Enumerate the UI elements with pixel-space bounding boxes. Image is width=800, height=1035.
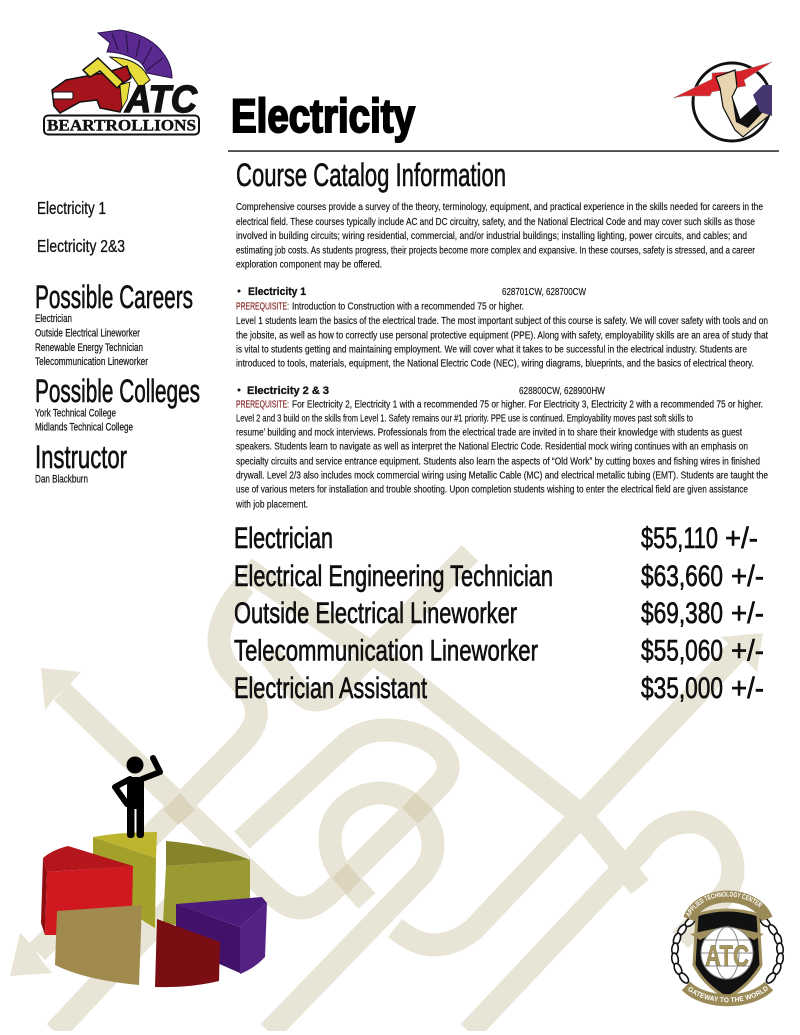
salary list: $69,380 [641,597,723,630]
dark red slice [155,919,220,987]
sidebar: possible careers [35,279,193,368]
sidebar: possible careers: Electrician [35,313,72,325]
shield [694,910,761,998]
sidebar: possible colleges: Possible Colleges [35,373,200,409]
text block: Electricity 1: PREREQUISITE: [236,300,289,312]
logo: ATC Beartrollions [44,30,199,134]
band: central loop [269,793,433,1032]
text block: Electricity 1: 628701CW, 628700CW [502,286,586,298]
title: Electricity [231,89,415,142]
laurel right [758,916,784,985]
sidebar: possible colleges: Midlands Technical College [35,422,133,434]
text block: course overview: exploration component may be offered. [236,258,382,270]
salary list: Outside Electrical Lineworker [234,597,517,630]
nameplate [44,116,199,134]
sidebar: possible careers: Renewable Energy Technician [35,342,143,354]
mane [120,82,130,108]
olive slice [163,841,250,925]
tan slice [55,905,142,985]
salary list: Electrician [234,522,333,555]
icon: person standing on chart [115,756,160,838]
salary list: $55,060 [641,634,723,668]
header rule [228,150,779,152]
laurel left [671,916,697,985]
sidebar: possible careers: Telecommunication Lineworker [35,356,148,368]
salary list: Telecommunication Lineworker [234,634,538,668]
helmet crest base [110,57,150,88]
salary list: $35,000 [641,672,723,705]
sidebar: possible careers: Outside Electrical Lineworker [35,328,140,340]
band: right arc [469,822,733,1032]
salary list: +/- [731,560,764,593]
globe [701,927,753,979]
ATC lettering: ATC [124,79,198,121]
text block: Electricity 1: Electricity 1 [248,286,306,298]
helmet brow [83,58,123,88]
salary list: +/- [731,672,764,705]
arrow: top-left band with loop [41,668,448,908]
heading: course catalog: Course Catalog Information [236,157,506,193]
sidebar: instructor: Instructor [35,439,127,475]
sidebar: instructor [35,439,127,486]
text block: Electricity 1: Introduction to Construction with a recommended 75 or higher. [292,300,524,312]
text block: Electricity 2 and 3: with job placement. [235,498,308,510]
text block: Electricity 1 [236,286,768,370]
band crossings [163,793,433,895]
sidebar: instructor: Dan Blackburn [35,474,88,486]
band: long diagonal [245,568,640,887]
top ribbon: APPLIED TECHNOLOGY CENTER [686,892,762,917]
ATC letters: ATC [705,940,749,973]
salary list: $63,660 [641,560,723,593]
salary list: +/- [731,634,764,668]
salary list [234,522,764,705]
red slice [41,846,133,935]
band: upper U curve [270,553,470,700]
text block: Electricity 2 and 3: Electricity 2 & 3 [247,385,329,397]
sidebar course links: Electricity 2&3 [37,236,125,256]
text block: Electricity 2 and 3: 628800CW, 628900HW [519,385,605,397]
sidebar: possible careers: Possible Careers [35,279,193,315]
shield rays [690,926,764,940]
horse head [52,66,131,113]
sidebar: possible colleges [35,373,200,434]
background: arrow and loop pattern [10,553,763,1032]
bottom ribbon: GATEWAY TO THE WORLD [688,986,768,1002]
sidebar: possible colleges: York Technical College [35,408,116,420]
text block: course overview [236,201,763,270]
band: lower-left straight strip [55,850,225,1032]
logo: ATC Beartrollions: BEARTROLLIONS [47,118,196,134]
text block: Electricity 2 and 3: PREREQUISITE: [236,398,289,410]
salary list: Electrical Engineering Technician [234,560,553,593]
arrow: bottom-left band curving up [10,585,256,976]
sidebar course links [37,198,125,256]
purple slice [176,897,267,974]
yellow slice [93,832,157,928]
sidebar course links: Electricity 1 [37,198,106,218]
badge: Applied Technology Center seal [670,890,784,1006]
salary list: Electrician Assistant [234,672,427,705]
salary list: $55,110 [641,522,718,555]
icon: arm holding lightning bolt [673,62,772,141]
text block: Electricity 2 and 3 [235,385,768,510]
arrow: top-right band [395,633,763,945]
salary list: +/- [725,522,758,555]
salary list: +/- [731,597,764,630]
illustration: 3D pie chart [41,832,267,987]
crest [98,30,172,78]
teeth [53,92,73,99]
